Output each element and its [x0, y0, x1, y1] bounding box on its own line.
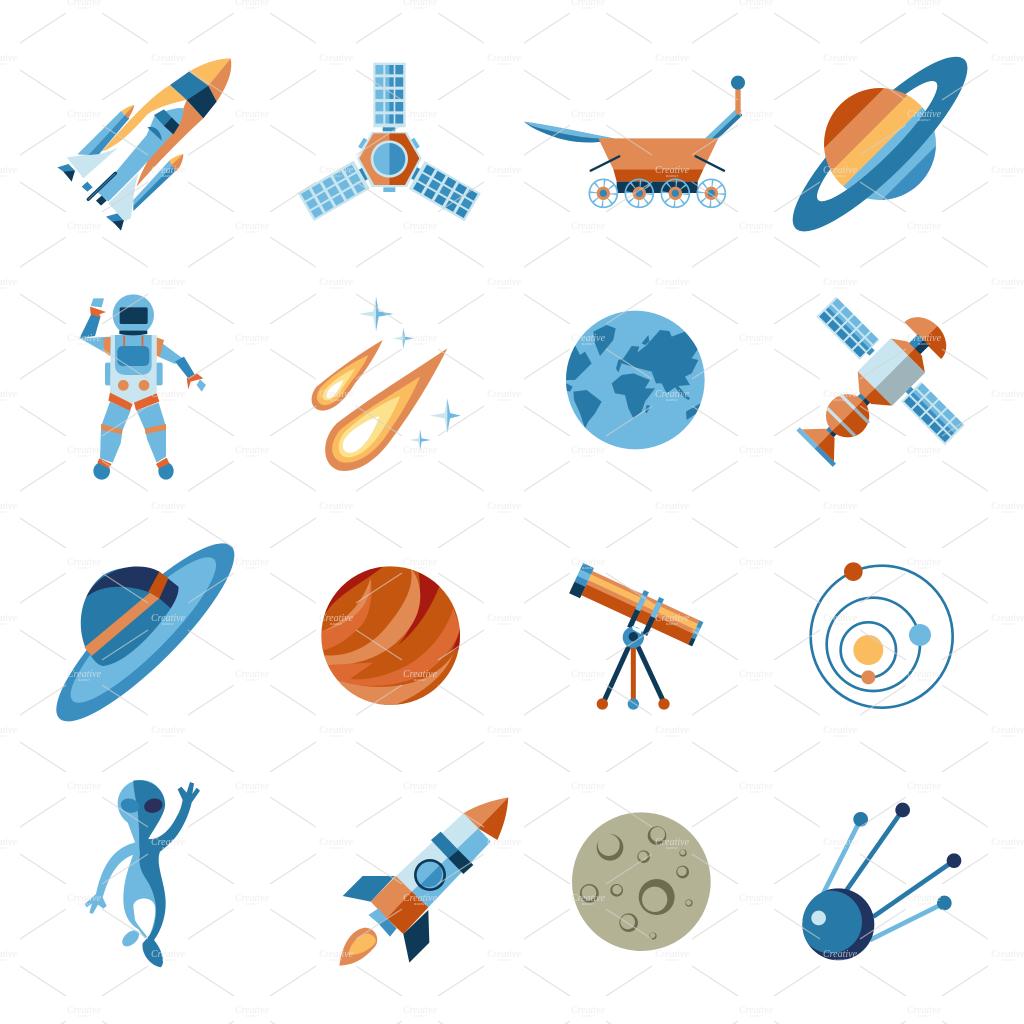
navy cap — [87, 567, 178, 608]
icon: astronaut — [79, 294, 206, 480]
boots — [93, 458, 174, 480]
right solar panel — [405, 159, 481, 221]
icon: moon with craters — [572, 812, 711, 951]
upper solar panel — [816, 297, 882, 363]
tripod legs — [603, 647, 664, 703]
legs — [100, 402, 166, 463]
continents — [563, 325, 703, 428]
lower band — [327, 608, 461, 686]
planets — [844, 562, 931, 684]
module hull — [858, 338, 925, 406]
star 1 — [359, 297, 393, 331]
star 2 — [393, 328, 414, 349]
dish antenna — [524, 122, 614, 142]
star 3 — [430, 398, 461, 433]
icon: alien — [85, 780, 200, 967]
icon: earth globe — [563, 311, 705, 449]
left solar panel — [298, 159, 373, 221]
tripod feet — [597, 698, 670, 710]
icon: space shuttle with boosters — [57, 58, 231, 231]
dome — [904, 308, 956, 359]
left booster — [57, 105, 134, 182]
top solar panel — [373, 63, 406, 131]
orbits — [811, 566, 953, 708]
rover body — [598, 138, 718, 193]
star 4 — [409, 429, 431, 451]
red stripe — [398, 572, 440, 645]
right edge red — [451, 628, 460, 652]
sun — [853, 635, 883, 665]
crater rims — [580, 826, 693, 940]
lower solar panel — [898, 379, 965, 445]
alien eyes — [119, 796, 164, 815]
icon: sputnik satellite — [799, 803, 961, 960]
crater floors — [582, 827, 691, 938]
raised arm — [79, 298, 112, 356]
alien dark side — [133, 780, 200, 967]
nose cone — [463, 797, 508, 840]
fuselage — [396, 813, 491, 907]
icon: space station — [749, 261, 1001, 512]
orbiter wings — [67, 147, 138, 221]
antennas — [823, 810, 954, 940]
inner ring — [56, 542, 231, 718]
shuttle tank body — [102, 85, 203, 187]
necks — [822, 334, 929, 441]
hexagon hub — [357, 132, 422, 187]
leg gap — [133, 899, 155, 938]
bottom light stripe — [337, 653, 453, 708]
orbiter engine details — [82, 173, 115, 206]
telescope tube — [567, 562, 705, 655]
icon: comets and stars — [312, 297, 461, 471]
module cones — [848, 331, 932, 415]
icon: solar system — [811, 562, 953, 708]
front ring — [796, 60, 968, 232]
engine section — [368, 876, 428, 937]
outer ring — [36, 523, 254, 741]
small comet — [312, 340, 383, 411]
orbiter body — [97, 108, 183, 202]
helmet — [113, 294, 154, 336]
icon: jupiter striped planet — [320, 562, 463, 708]
shuttle main tank nose — [170, 58, 231, 118]
planet dome — [81, 567, 178, 666]
exhaust flame — [339, 928, 377, 966]
porthole — [414, 859, 446, 891]
sphere module — [817, 385, 878, 446]
large comet — [325, 348, 447, 471]
lowered arm — [157, 337, 206, 392]
rover arm with sensor ball — [705, 76, 745, 138]
hips and knee bands — [108, 393, 159, 411]
sphere — [799, 888, 874, 960]
red storm region — [324, 566, 384, 616]
side pack — [105, 363, 163, 385]
right booster — [106, 154, 183, 231]
icon: lunar rover — [524, 76, 745, 207]
planet stripes — [824, 88, 936, 200]
orbiter cockpit — [147, 109, 179, 141]
swirl — [322, 578, 372, 651]
icon: three panel satellite — [298, 63, 481, 221]
antenna tips — [853, 803, 961, 910]
torso — [110, 335, 157, 403]
icon: blue ringed planet — [36, 523, 254, 741]
icon: rocket — [339, 797, 508, 966]
orange band — [84, 593, 159, 656]
small tabs — [358, 138, 420, 192]
struts — [591, 156, 724, 171]
wheels — [589, 179, 725, 207]
icon: telescope — [567, 562, 705, 710]
fins — [343, 876, 429, 963]
rear ring — [773, 37, 987, 251]
alien light side — [85, 780, 164, 949]
chest unit — [115, 335, 152, 391]
fuselage band — [431, 832, 473, 874]
light stripe — [323, 568, 420, 665]
mount — [623, 626, 644, 648]
rust band — [148, 572, 168, 598]
icon: ringed planet saturn — [792, 56, 968, 232]
engine flare — [796, 415, 848, 467]
